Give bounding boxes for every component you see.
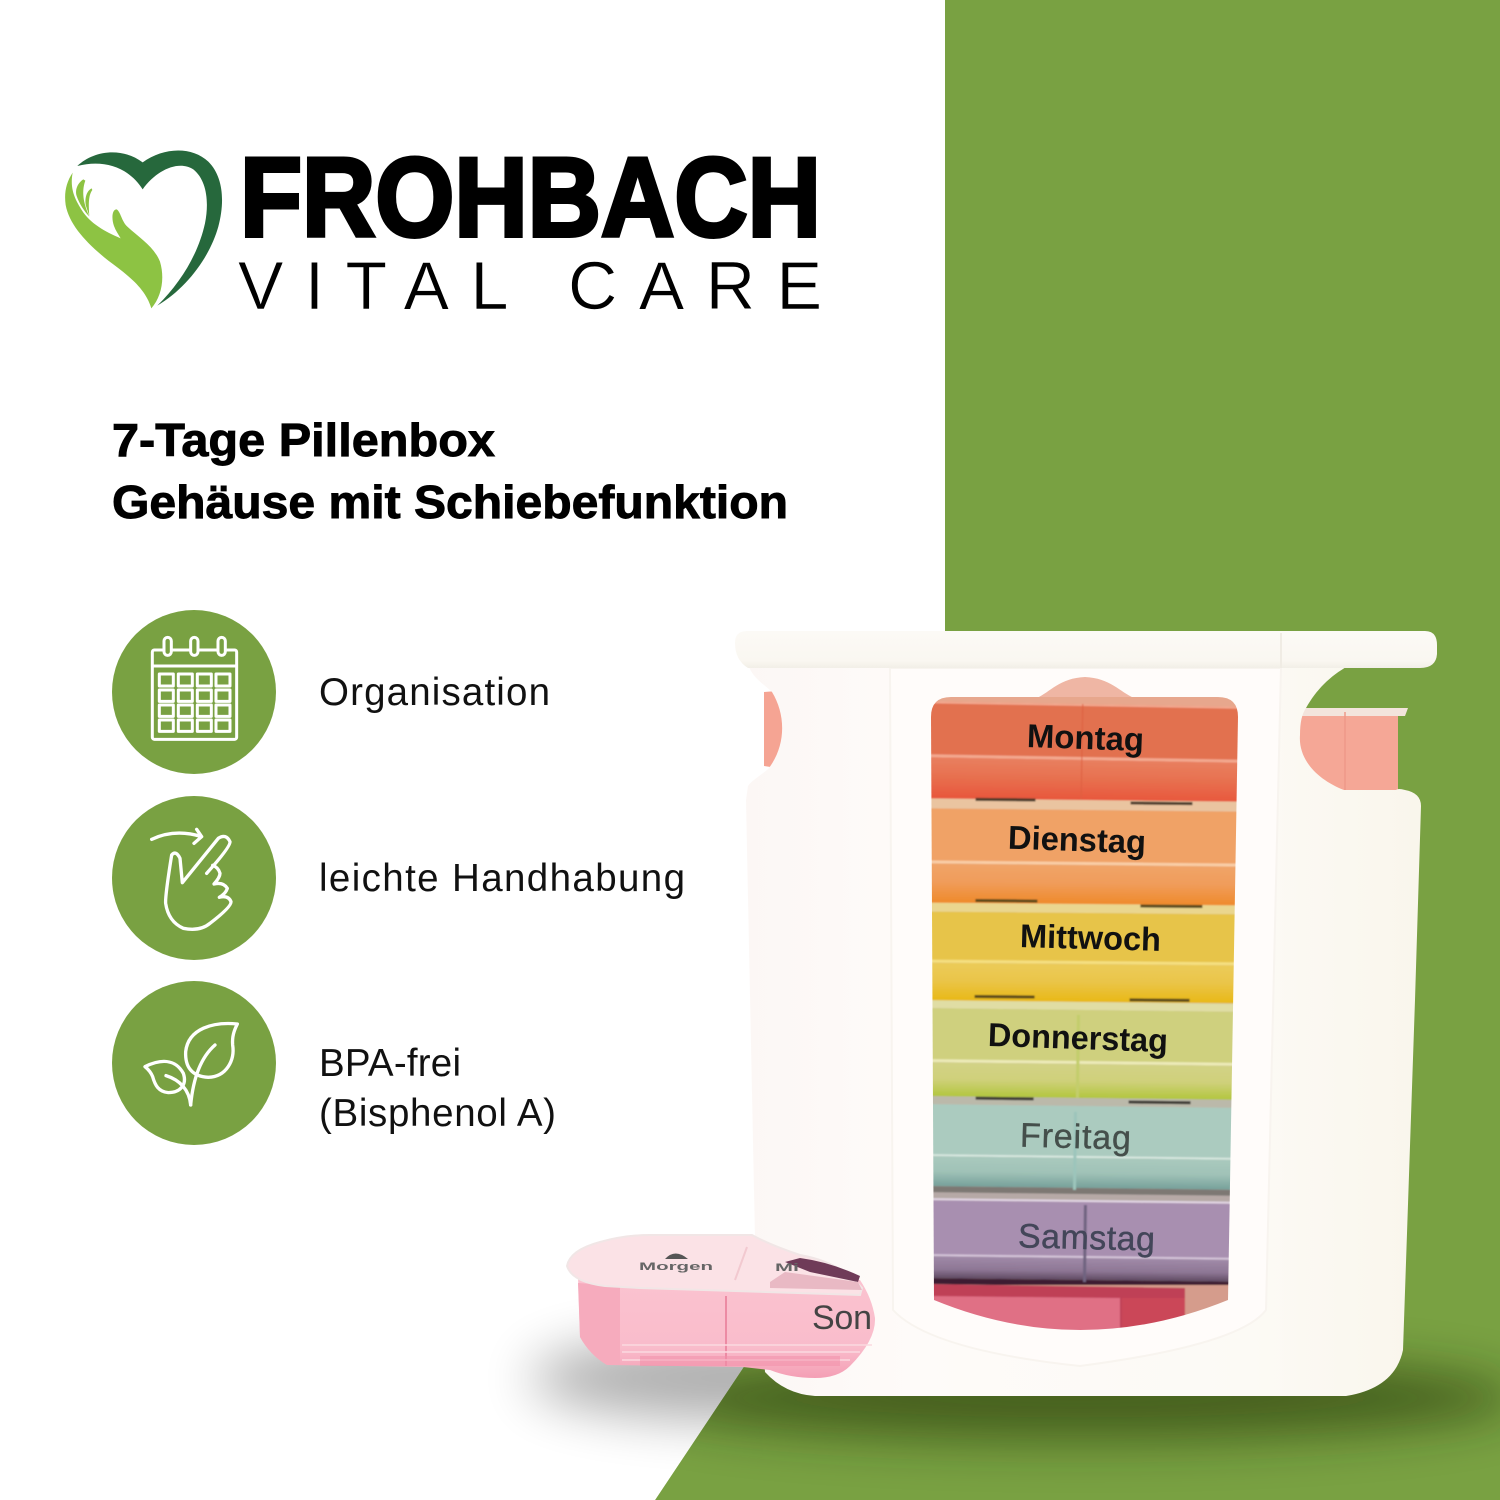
- heading: 7-Tage Pillenbox: [112, 414, 495, 466]
- drawer body: [578, 1276, 875, 1378]
- day labels: Mittwoch: [1020, 917, 1161, 958]
- icon: swipe hand: [152, 829, 231, 929]
- label: Organisation: Organisation: [319, 671, 550, 714]
- feature: organisation: [112, 610, 276, 774]
- icon: leaves: [145, 1024, 237, 1105]
- heading: [112, 414, 788, 528]
- day labels: Montag: [1026, 717, 1145, 758]
- heading: Gehäuse mit Schiebefunktion: [112, 476, 788, 528]
- icon: calendar: [152, 637, 237, 739]
- day labels: Freitag: [1020, 1117, 1131, 1157]
- label: BPA-frei (Bisphenol A): [319, 1042, 556, 1135]
- product: pill box tower: [567, 631, 1437, 1396]
- drawer: Dienstag: [919, 797, 1251, 908]
- drawer: Freitag: [933, 1096, 1232, 1196]
- drawer: Donnerstag: [919, 1000, 1251, 1100]
- feature: easy handling: [112, 796, 276, 960]
- day labels: [987, 717, 1169, 1259]
- drawer: Sonntag remainder: [934, 1283, 1228, 1330]
- front panel of housing: [890, 668, 1281, 1366]
- drawer lid: [567, 1235, 862, 1295]
- drawer label Son: Son: [812, 1299, 872, 1337]
- feature: BPA free: [112, 981, 276, 1145]
- logo wordmark: FROHBACH: [240, 135, 821, 260]
- lid sun icon: [665, 1254, 688, 1259]
- day labels: Donnerstag: [987, 1016, 1169, 1059]
- pulled out Sonntag drawer: [567, 1235, 875, 1378]
- lid label Mittag fragment: Mi: [775, 1262, 799, 1274]
- housing body: [746, 664, 1421, 1396]
- logo wordmark: VITAL CARE: [238, 248, 822, 324]
- green background panel: [655, 0, 1500, 1500]
- label: leichte Handhabung: leichte Handhabung: [319, 857, 685, 900]
- drawer tab: [1037, 677, 1134, 698]
- window with day drawers: [931, 697, 1238, 1330]
- lid: [735, 631, 1437, 668]
- drawer: Montag: [931, 697, 1238, 802]
- lid divider: [735, 1247, 747, 1280]
- right drawer peek: [1296, 708, 1408, 794]
- logo wordmark: [238, 135, 822, 324]
- day labels: Dienstag: [1007, 819, 1147, 860]
- drawer: Mittwoch: [920, 899, 1250, 1003]
- day labels: Samstag: [1018, 1217, 1155, 1259]
- left drawer peek: [764, 690, 790, 770]
- product shadow: [514, 1321, 1500, 1500]
- lid label Morgen: Morgen: [639, 1261, 713, 1273]
- logo: heart and hand: [65, 150, 222, 308]
- label: BPA-frei (Bisphenol A): BPA-frei: [319, 1042, 461, 1085]
- label: BPA-frei (Bisphenol A): (Bisphenol A): [319, 1092, 556, 1135]
- drawer: Samstag: [934, 1192, 1230, 1286]
